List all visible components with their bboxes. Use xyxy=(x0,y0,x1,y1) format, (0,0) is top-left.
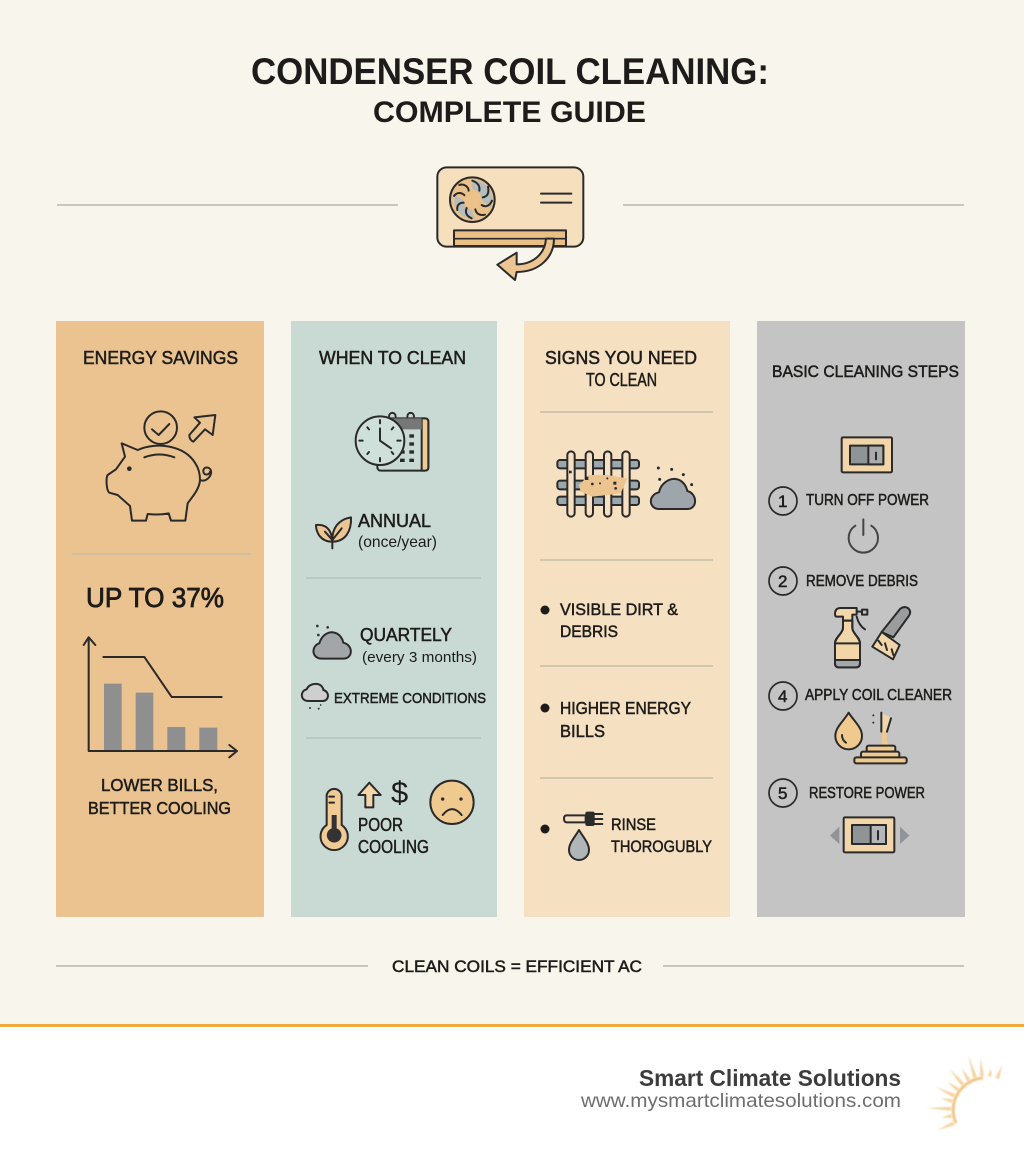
item: quarterly xyxy=(313,625,477,666)
item: rinse thoroughly: RINSE xyxy=(611,816,656,834)
brand name: Smart Climate Solutions xyxy=(639,1065,901,1091)
icon: clock and calendar xyxy=(356,413,428,471)
title: CONDENSER COIL CLEANING: xyxy=(251,51,769,92)
title xyxy=(251,51,769,129)
item: annual: ANNUAL xyxy=(358,511,431,531)
step 2: remove debris: 2 xyxy=(778,572,787,591)
item: poor cooling: COOLING xyxy=(358,837,429,857)
icon: cloud xyxy=(313,625,351,659)
step 5: restore power: RESTORE POWER xyxy=(809,785,925,802)
step 1: turn off power xyxy=(769,487,929,515)
item: visible dirt and debris: VISIBLE DIRT & xyxy=(560,600,679,619)
caption: lower bills, better cooling: BETTER COOLING xyxy=(88,798,231,818)
title: COMPLETE GUIDE xyxy=(373,96,646,129)
icon: switch off xyxy=(842,437,892,472)
item: annual: (once/year) xyxy=(358,534,437,551)
heading: basic cleaning steps: BASIC CLEANING STEPS xyxy=(772,363,959,381)
icon: air conditioner unit with airflow arrow xyxy=(437,167,583,280)
tagline: CLEAN COILS = EFFICIENT AC xyxy=(392,958,642,976)
icon: dollar sign: $ xyxy=(391,775,408,810)
icon: power symbol xyxy=(849,519,878,553)
step 4: apply coil cleaner: APPLY COIL CLEANER xyxy=(805,687,952,704)
item: poor cooling xyxy=(320,775,474,857)
item: higher energy bills: HIGHER ENERGY xyxy=(560,698,691,718)
item: visible dirt and debris xyxy=(540,600,679,641)
icon: storm cloud xyxy=(302,684,328,710)
icon: sad face xyxy=(430,781,474,824)
step 4: apply coil cleaner xyxy=(769,682,952,710)
item: higher energy bills xyxy=(540,698,691,741)
icon: drop and foam nozzle xyxy=(835,713,907,763)
heading: signs you need to clean: TO CLEAN xyxy=(586,370,657,390)
panel: signs you need to clean xyxy=(524,321,730,917)
panel: basic cleaning steps xyxy=(757,321,965,917)
step 2: remove debris xyxy=(769,567,918,595)
icon: spray bottle and brush xyxy=(835,607,910,667)
step 4: apply coil cleaner: 4 xyxy=(778,687,787,706)
heading: when to clean: WHEN TO CLEAN xyxy=(319,348,466,368)
icon: up arrow xyxy=(358,783,381,807)
heading: signs you need to clean xyxy=(545,348,697,390)
item: rinse thoroughly xyxy=(540,813,712,860)
heading: signs you need to clean: SIGNS YOU NEED xyxy=(545,348,697,368)
icon: leaf xyxy=(316,517,351,548)
icon: brush and water drop xyxy=(564,813,602,860)
panel: when to clean xyxy=(291,321,497,917)
item: poor cooling: POOR xyxy=(358,815,403,835)
step 5: restore power xyxy=(769,779,925,807)
item: quarterly: (every 3 months) xyxy=(362,649,477,666)
icon: switch on with arrows xyxy=(830,817,909,852)
footer xyxy=(0,1024,1024,1154)
caption: lower bills, better cooling: LOWER BILLS, xyxy=(101,775,218,795)
stat: up to 37%: UP TO 37% xyxy=(86,582,224,613)
icon: piggy bank with coin and arrow xyxy=(107,411,215,521)
step 1: turn off power: 1 xyxy=(778,492,787,511)
panel: energy savings xyxy=(56,321,264,917)
step 1: turn off power: TURN OFF POWER xyxy=(806,492,929,509)
chart: falling energy bills xyxy=(84,637,237,757)
step 2: remove debris: REMOVE DEBRIS xyxy=(806,573,918,590)
caption: lower bills, better cooling xyxy=(88,775,231,818)
logo: sun xyxy=(926,1055,1004,1132)
item: extreme conditions: EXTREME CONDITIONS xyxy=(334,690,486,707)
item: quarterly: QUARTELY xyxy=(360,625,452,645)
item: annual xyxy=(316,511,437,551)
icon: dirty coil and dust cloud xyxy=(557,451,695,517)
item: extreme conditions xyxy=(302,684,486,710)
icon: thermometer xyxy=(320,789,348,850)
item: rinse thoroughly: THOROGUBLY xyxy=(611,838,712,856)
heading: energy savings: ENERGY SAVINGS xyxy=(83,348,238,368)
website: www.mysmartclimatesolutions.com xyxy=(580,1090,901,1112)
step 5: restore power: 5 xyxy=(778,784,787,803)
item: higher energy bills: BILLS xyxy=(560,721,605,741)
item: visible dirt and debris: DEBRIS xyxy=(560,622,618,641)
